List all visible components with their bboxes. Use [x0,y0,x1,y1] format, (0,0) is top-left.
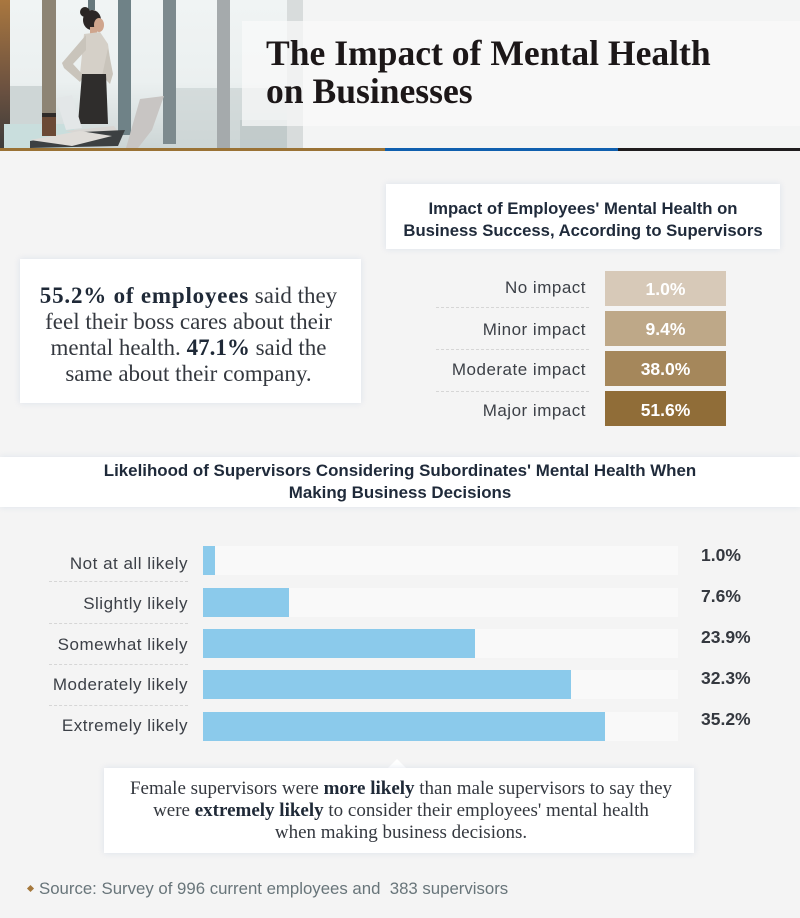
callout text: same about their company. [65,361,312,386]
callout text: feel their boss cares about their [45,309,332,334]
chart: likelihood of considering mental health: Somewhat likely [58,635,188,654]
chart: impact on business success: 9.4% [646,319,685,339]
chart: impact on business success: Moderate impact [452,360,586,379]
heading: likelihood chart: Likelihood of Supervisors Considering Subordinates' Mental Health When [104,461,696,480]
heading: business success chart: Business Success, According to Supervisors [403,221,763,240]
panel: employee callout [20,259,361,403]
chart: impact on business success: No impact [505,278,586,297]
tri-colour header rule [0,148,800,151]
chart: likelihood of considering mental health: Extremely likely [62,716,188,735]
chart: impact on business success: 1.0% [646,279,685,299]
chart: likelihood of considering mental health: Moderately likely [53,675,188,694]
panel: female supervisors callout: when making business decisions. [275,822,527,843]
heading: likelihood chart: Making Business Decisions [289,483,511,502]
heading: likelihood chart [0,457,800,507]
callout text: mental health. 47.1% said the [51,335,326,360]
panel: female supervisors callout [104,768,694,853]
chart: likelihood of considering mental health: Slightly likely [83,594,188,613]
chart: impact on business success: Major impact [483,401,586,420]
chart: likelihood of considering mental health: 35.2% [701,709,751,729]
chart: likelihood of considering mental health: 32.3% [701,668,751,688]
title panel [242,21,800,126]
panel: female supervisors callout: were extremely likely to consider their employees' mental health [153,800,649,821]
chart: impact on business success [436,271,726,426]
icon: diamond bullet [27,885,34,892]
header photo: woman at office window [0,0,303,148]
chart: likelihood of considering mental health: 23.9% [701,627,751,647]
chart: impact on business success: Minor impact [483,320,586,339]
source note: Source: Survey of 996 current employees and 383 supervisors [39,879,508,898]
heading: business success chart: Impact of Employees' Mental Health on [428,199,738,218]
title text: The Impact of Mental Health [266,33,711,73]
callout text: 55.2% of employees said they [40,283,337,308]
callout pointer [388,759,406,768]
chart: likelihood of considering mental health: 1.0% [701,545,741,565]
chart: impact on business success: 51.6% [641,400,690,420]
chart: likelihood of considering mental health: 7.6% [701,586,741,606]
panel: female supervisors callout: Female supervisors were more likely than male supervisors to say they [130,778,672,799]
heading: business success chart [386,184,780,249]
chart: likelihood of considering mental health: Not at all likely [70,554,188,573]
chart: impact on business success: 38.0% [641,359,690,379]
title text [266,33,711,111]
title text: on Businesses [266,71,473,111]
callout text [40,283,338,386]
